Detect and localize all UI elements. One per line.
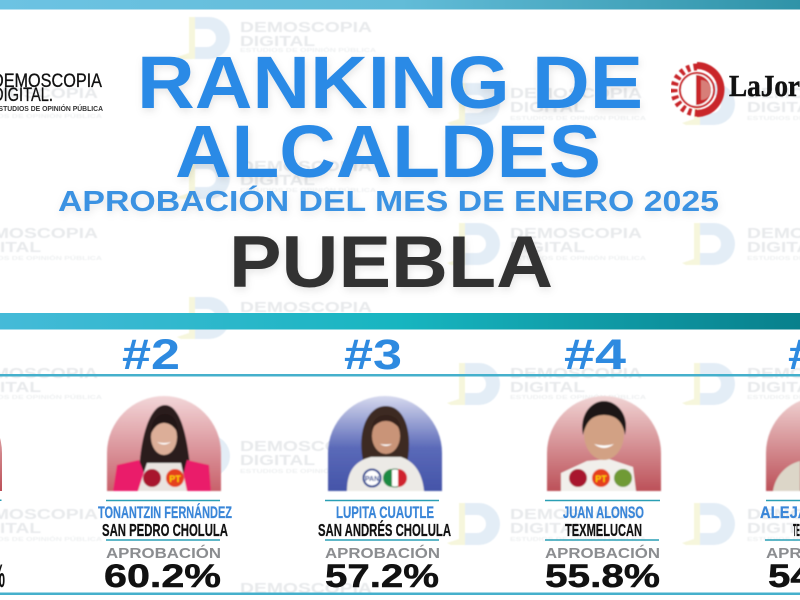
card: rank 2	[98, 331, 232, 594]
subtitle: APROBACIÓN DEL MES DE ENERO 2025	[58, 184, 719, 218]
rank number 2: #2	[122, 331, 180, 379]
title: Ranking de Alcaldes: ALCALDES	[175, 110, 601, 193]
photo: Lupita Cuautle: PAN	[365, 476, 379, 483]
municipality: SAN ANDRÉS CHOLULA	[318, 519, 451, 540]
watermark pattern: DEMOSCOPIA	[240, 299, 372, 316]
title: Ranking de Alcaldes: RANKING DE	[137, 41, 643, 124]
watermark pattern: DIGITAL	[510, 239, 585, 256]
watermark pattern: ESTUDIOS DE OPINIÓN PÚBLICA	[240, 467, 377, 475]
rank number 3: #3	[344, 331, 402, 379]
watermark pattern: DEMOSCOPIA	[510, 85, 642, 102]
approval label: APROBACIÓN	[325, 544, 440, 562]
photo: Tonantzin Fernández: PT	[169, 474, 181, 484]
name: LUPITA CUAUTLE	[336, 504, 434, 522]
watermark pattern: ESTUDIOS DE OPINIÓN PÚBLICA	[240, 186, 377, 194]
top bar	[0, 0, 800, 10]
municipality: TEXMELUCAN	[565, 520, 642, 540]
name: TONANTZIN FERNÁNDEZ	[98, 503, 232, 522]
watermark pattern: DEMOSCOPIA	[240, 580, 372, 597]
municipality: SAN PEDRO CHOLULA	[102, 520, 228, 540]
watermark pattern: DIGITAL	[240, 33, 315, 50]
watermark pattern: DIGITAL	[510, 520, 585, 537]
rank number 4: #4	[564, 331, 626, 379]
approval label: APROBACIÓN	[106, 544, 221, 562]
watermark pattern: DIGITAL	[510, 99, 585, 116]
watermark pattern: DIGITAL	[240, 172, 315, 189]
middle bar	[0, 313, 800, 330]
watermark pattern: DEMOSCOPIA	[510, 225, 642, 242]
title: Ranking de Alcaldes	[137, 41, 643, 193]
photo: Juan Alonso	[547, 396, 661, 491]
logo: Demoscopia Digital	[0, 71, 103, 113]
approval value: 55.8%	[545, 558, 660, 594]
watermark pattern: ESTUDIOS DE OPINIÓN PÚBLICA	[510, 535, 647, 543]
rule under ranks	[0, 374, 800, 376]
watermark pattern: DEMOSCOPIA	[240, 438, 372, 455]
watermark pattern: ESTUDIOS DE OPINIÓN PÚBLICA	[240, 46, 377, 54]
card: rank 5 partial	[760, 331, 800, 594]
rule bottom	[0, 592, 800, 595]
card: rank 4	[545, 331, 661, 594]
card: rank 1 partial	[0, 396, 5, 594]
card: rank 3	[318, 331, 451, 594]
watermark pattern: ESTUDIOS DE OPINIÓN PÚBLICA	[510, 114, 647, 122]
photo: Alejandro	[766, 396, 800, 491]
photo: Tonantzin Fernández	[107, 396, 221, 491]
watermark pattern: DIGITAL	[240, 452, 315, 469]
watermark pattern: ESTUDIOS DE OPINIÓN PÚBLICA	[510, 254, 647, 262]
photo: Juan Alonso: PT	[595, 474, 607, 484]
heading: Puebla: PUEBLA	[229, 222, 553, 303]
watermark pattern: ESTUDIOS DE OPINIÓN PÚBLICA	[510, 393, 647, 401]
watermark pattern: DEMOSCOPIA	[240, 19, 372, 36]
approval label: APROBACIÓN	[545, 544, 660, 562]
watermark pattern: DEMOSCOPIA	[510, 506, 642, 523]
name: JUAN ALONSO	[563, 504, 644, 522]
watermark pattern: DIGITAL	[510, 379, 585, 396]
logo: La Jornada	[674, 62, 800, 117]
approval value: 57.2%	[325, 558, 439, 594]
watermark pattern: DEMOSCOPIA	[510, 365, 642, 382]
watermark pattern: DEMOSCOPIA	[240, 158, 372, 175]
approval value: 60.2%	[104, 558, 221, 594]
photo: Lupita Cuautle	[328, 396, 442, 491]
